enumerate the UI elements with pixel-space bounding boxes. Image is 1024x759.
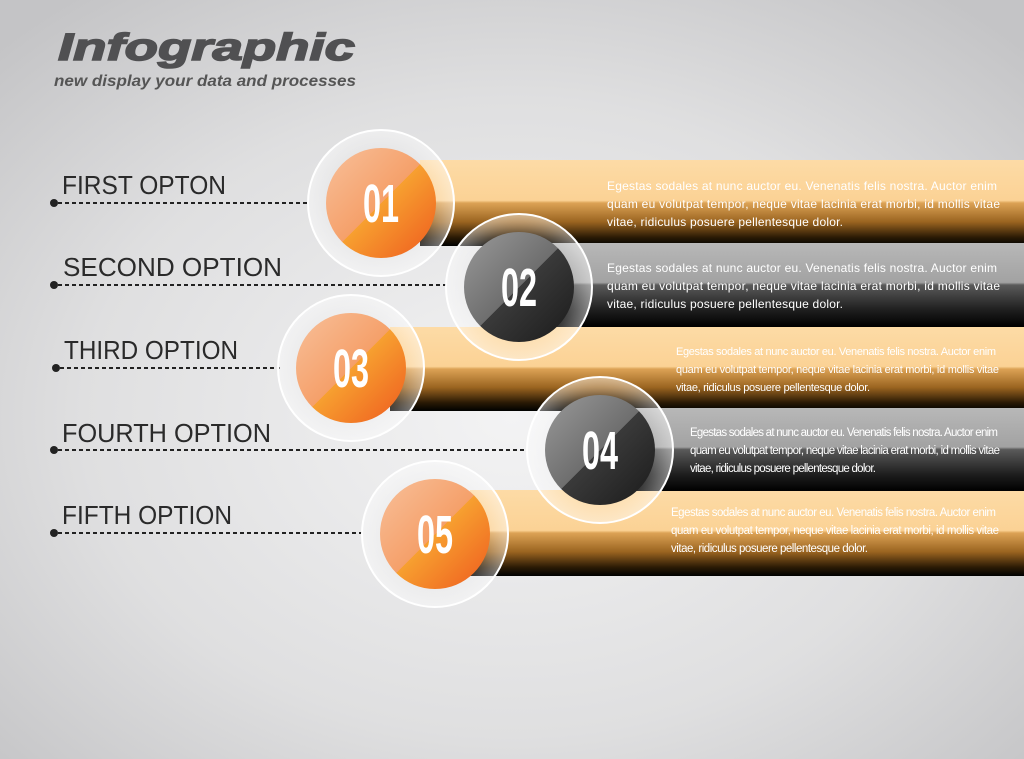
- bar 3: Egestas sodales at nunc auctor eu. Venenatis felis nostra. Auctor enim: [676, 346, 996, 358]
- circle 04: [527, 377, 673, 523]
- label 2: SECOND OPTION: [63, 252, 282, 282]
- bar 4: [590, 408, 1024, 491]
- circle 02: 02: [501, 259, 537, 318]
- title: Infographic: [58, 27, 355, 69]
- label 3: THIRD OPTION: [64, 335, 238, 365]
- label 1: FIRST OPTON: [62, 170, 226, 200]
- label 4: [50, 418, 528, 454]
- label 4: FOURTH OPTION: [62, 418, 271, 448]
- bar 1: quam eu volutpat tempor, neque vitae lacinia erat morbi, id mollis vitae: [607, 197, 1000, 211]
- circle 05: 05: [417, 506, 453, 565]
- bar 2: vitae, ridiculus posuere pellentesque dolor.: [607, 297, 843, 311]
- bar 2: quam eu volutpat tempor, neque vitae lacinia erat morbi, id mollis vitae: [607, 279, 1000, 293]
- subtitle: new display your data and processes: [54, 73, 356, 90]
- bar 4: vitae, ridiculus posuere pellentesque dolor.: [690, 463, 876, 475]
- circle 01: 01: [363, 175, 399, 234]
- bar 1: Egestas sodales at nunc auctor eu. Venenatis felis nostra. Auctor enim: [607, 179, 997, 193]
- label 1: [50, 170, 310, 207]
- circle 05: [362, 461, 508, 607]
- circle 01: [308, 130, 454, 276]
- circle 03: [278, 295, 424, 441]
- bar 3: [390, 327, 1024, 411]
- bar 2: [510, 243, 1024, 327]
- bar 4: quam eu volutpat tempor, neque vitae lacinia erat morbi, id mollis vitae: [690, 445, 1000, 457]
- bar 3: vitae, ridiculus posuere pellentesque dolor.: [676, 382, 870, 394]
- label 2: [50, 252, 447, 289]
- circle 03: 03: [333, 340, 369, 399]
- bar 5: vitae, ridiculus posuere pellentesque dolor.: [671, 543, 868, 555]
- bar 3: quam eu volutpat tempor, neque vitae lacinia erat morbi, id mollis vitae: [676, 364, 999, 376]
- bar 4: Egestas sodales at nunc auctor eu. Venenatis felis nostra. Auctor enim: [690, 427, 998, 439]
- label 3: [52, 335, 280, 372]
- bar 5: quam eu volutpat tempor, neque vitae lacinia erat morbi, id mollis vitae: [671, 525, 999, 537]
- bar 5: [470, 490, 1024, 576]
- bar 1: [420, 160, 1024, 246]
- bar 1: vitae, ridiculus posuere pellentesque dolor.: [607, 215, 843, 229]
- circle 04: 04: [582, 422, 618, 481]
- labels and dotted lines: [50, 170, 528, 537]
- label 5: FIFTH OPTION: [62, 500, 232, 530]
- circle 02: [446, 214, 592, 360]
- bar 5: Egestas sodales at nunc auctor eu. Venenatis felis nostra. Auctor enim: [671, 507, 996, 519]
- label 5: [50, 500, 364, 537]
- bar 2: Egestas sodales at nunc auctor eu. Venenatis felis nostra. Auctor enim: [607, 261, 997, 275]
